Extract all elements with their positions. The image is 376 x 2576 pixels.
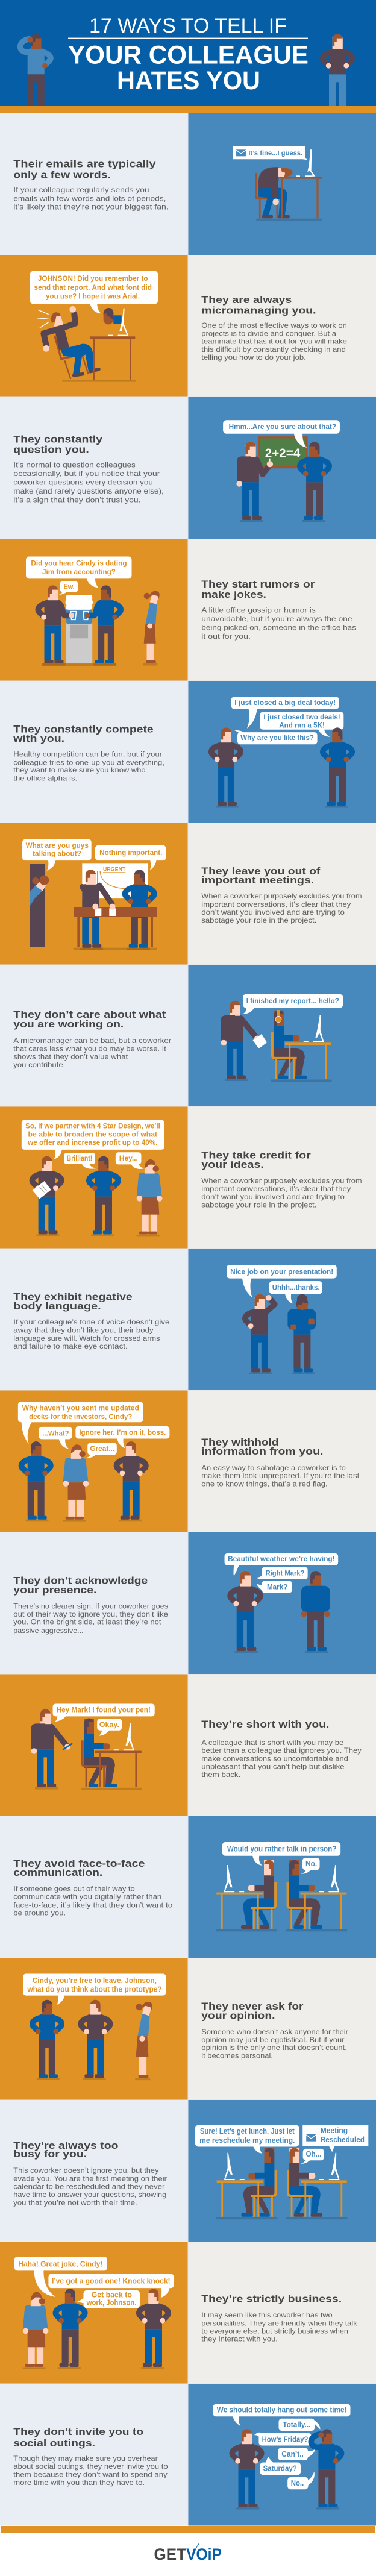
speech bubble [30,271,158,313]
body text: one to know things, that’s a red flag. [201,1480,328,1488]
body text: Healthy competition can be fun, but if your [13,750,162,759]
figure: man at desk [216,1860,277,1931]
title: YOUR COLLEAGUE [68,40,309,69]
illustration: rescheduled lunch [195,2125,368,2219]
heading: communication. [13,1867,102,1878]
speech bubbles: Right Mark? [266,1569,304,1578]
heading: They’re always too [13,2140,119,2151]
speech bubble: send that report. And what font did [34,283,152,292]
figure: colleague hands on hips [300,442,329,522]
speech bubbles: Okay. [99,1720,119,1729]
body text: Someone who doesn’t ask anyone for their [201,2028,348,2036]
panel: 13 face-to-face [0,1816,376,1958]
heading: They never ask for [201,2001,304,2012]
illustration: excuses [213,2404,350,2510]
heading [13,434,103,456]
heading [201,294,316,316]
heading: your opinion. [201,2010,275,2021]
heading: you are working on. [13,1018,124,1030]
figure: man [230,1571,260,1653]
body text: If someone goes out of their way to [13,1885,135,1893]
speech bubbles [22,839,166,871]
figure: man with pen [31,1709,70,1790]
body text: emails with few words and lots of periods, [13,194,166,202]
heading: They don’t invite you to [13,2426,143,2437]
title: HATES YOU [117,66,260,95]
illustration: stolen idea [22,1120,164,1236]
body text: the office alpha is. [13,774,77,782]
body text: opinion is the only one that doesn’t count, [201,2043,347,2052]
figure: man at cooler [38,585,74,666]
figure: man [232,2429,262,2510]
speech bubble: It’s fine...I guess. [248,149,302,157]
figure: man hands on hips [212,727,240,808]
body text: unpleasant that you can’t help but dislike [201,1763,345,1771]
body text: A colleague that is short with you may be [201,1738,344,1747]
heading [201,1150,311,1170]
heading [13,1291,133,1312]
door with peeking woman [30,864,49,947]
illustration: one-upping colleagues [212,697,352,808]
figure: woman [23,2292,48,2369]
figure: woman scratching head [20,34,51,114]
speech bubbles: work, Johnson. [86,2298,136,2307]
body text: it becomes personal. [201,2052,273,2060]
body text: coworker questions every decision you [13,478,153,487]
heading [13,158,156,180]
body text [13,2166,167,2207]
illustration: water cooler gossip [26,556,160,666]
speech bubbles [225,1553,338,1593]
illustration: chalkboard scene [223,420,340,522]
heading: make jokes. [201,589,266,600]
heading: They’re strictly business. [201,2293,342,2304]
speech bubbles: Uhhh...thanks. [272,1283,320,1291]
speech bubbles: No.. [291,2479,304,2487]
heading [201,2001,304,2021]
body text [201,1738,362,1779]
papers and arms [83,885,116,916]
figure: woman [137,1159,163,1236]
speech bubbles [18,1402,169,1458]
speech bubbles [222,1842,340,1874]
speech bubble: you use? I hope it was Arial. [46,292,140,301]
speech bubbles: And ran a 5K! [279,721,325,730]
body text: away that they don’t like you, their body [13,1326,154,1334]
figure: colleague at cooler [84,585,121,666]
figure: colleague at table [125,870,154,950]
body text: have time to answer your questions, showing [13,2190,166,2199]
illustration: man leaning back at desk [37,306,136,382]
body text [13,1036,171,1069]
figure: man at desk [286,2148,348,2219]
speech bubbles [53,1704,155,1736]
speech bubble [223,420,340,448]
heading: They avoid face-to-face [13,1858,145,1869]
panel: 5 compete [0,681,376,823]
body text: teammate that has it out for you will make [201,337,347,346]
speech bubbles: Nice job on your presentation! [230,1267,333,1276]
body text: make (and rarely questions anyone else), [13,487,164,495]
speech bubble: Hmm...Are you sure about that? [229,422,336,431]
body text: calendar to be rescheduled and they never [13,2183,164,2191]
panel: 11 presence [0,1532,376,1674]
panel: 8 credit [0,1106,376,1249]
illustration: slumped at desk [233,146,322,221]
figure: woman looking down [135,2002,152,2080]
speech bubbles [213,2404,350,2489]
speech bubbles: talking about? [33,849,81,857]
body text: opinion may just be egotistical. But if your [201,2035,345,2044]
title: 17 WAYS TO TELL IF [89,14,287,37]
body text: to everyone else, but strictly business when [201,2327,348,2336]
pen [63,1743,72,1750]
figure: colleague at desk [286,1860,347,1931]
illustration: ignored at desk [221,994,343,1082]
panel: 3 question [0,397,376,539]
speech bubbles: be able to broaden the scope of what [28,1130,157,1139]
logo: VOiP [186,2545,222,2563]
speech bubbles: Saturday? [263,2464,297,2473]
speech bubbles: Totally... [283,2420,310,2429]
body text: be around you. [13,1909,66,1917]
icon: envelope [306,2134,316,2142]
speech bubbles: we offer and increase profit up to 40%. [27,1138,157,1147]
heading: Their emails are typically [13,158,156,170]
panel: 7 don't care [0,965,376,1106]
speech bubbles [227,1265,337,1303]
figure: colleague arms crossed [287,1294,316,1374]
illustration: crossed arms [227,1265,337,1374]
heading [13,1009,166,1030]
speech bubbles: Meeting [321,2126,348,2135]
illustration: back to back desks [216,1842,347,1931]
figure: man [116,1441,146,1521]
body text: important conversations, it’s clear that they [201,1185,351,1193]
illustration: woman dismissed [23,1973,166,2080]
body text: personalities. They are friendly when they talk [201,2319,358,2328]
speech bubbles [195,2125,368,2164]
body text [201,1464,360,1488]
panel: 9 body language [0,1249,376,1390]
heading: They constantly [13,434,103,445]
speech bubble: Cindy, you’re free to leave. Johnson, [33,1976,157,1985]
body text: sabotage your role in the project. [201,1200,316,1209]
water cooler [42,595,116,666]
speech bubbles: Nothing important. [99,848,162,857]
heading: They don’t acknowledge [13,1575,148,1587]
heading: They are always [201,294,292,306]
body text: This coworker doesn’t ignore you, but they [13,2166,158,2175]
figure: man [81,2000,110,2080]
heading [13,2140,119,2160]
speech bubbles: Would you rather talk in person? [227,1844,336,1854]
chalkboard: 2+2=4 [265,447,300,460]
body text: it’s a sign that they don’t trust you. [13,495,141,504]
header banner [0,0,376,114]
panel: 4 rumors [0,539,376,681]
speech bubbles: Hey... [119,1154,138,1162]
icon: headphones [275,1010,281,1022]
speech bubbles [22,1120,164,1169]
body text: There’s no clearer sign. If your coworker goes [13,1602,168,1611]
heading [13,723,154,744]
speech bubbles: me reschedule my meeting. [199,2136,295,2145]
speech bubbles: Oh... [306,2150,321,2158]
body text [201,892,362,924]
speech bubbles: Did you hear Cindy is dating [31,559,127,568]
heading: your ideas. [201,1159,264,1170]
speech bubbles: How’s Friday? [262,2435,308,2444]
speech bubbles: I just closed a big deal today! [234,698,336,707]
body text: better than a colleague that ignores you. They [201,1746,362,1755]
body text: passive aggressive... [13,1626,83,1635]
speech bubbles: Ew. [63,583,75,591]
heading: They constantly compete [13,723,154,735]
body text: It’s normal to question colleagues [13,461,136,469]
figure: man with paper [32,1156,61,1236]
body text: them back. [201,1770,240,1779]
figure: Mark arms down [301,1571,330,1653]
speech bubbles: Can’t.. [281,2450,304,2458]
panel: 14 opinion [0,1958,376,2099]
heading: with you. [13,733,64,744]
figure: man pointing at board [236,442,273,522]
figure: man holding report [221,1001,260,1081]
figure: boss [33,2000,61,2080]
body text [201,2028,348,2060]
speech bubbles: Jim from accounting? [42,568,116,576]
speech bubbles: Haha! Great joke, Cindy! [18,2260,102,2269]
illustration: closed-door meeting [22,839,166,950]
body text: It may seem like this coworker has two [201,2311,333,2319]
body text: you contribute. [13,1061,65,1069]
speech bubbles [14,2257,174,2308]
body text: they interact with you. [201,2334,278,2343]
body text [13,1318,170,1350]
heading: They’re short with you. [201,1719,329,1730]
illustration: jokes [14,2257,174,2369]
figure: colleague scratching head [311,2429,342,2510]
icon: envelope [236,149,246,156]
speech bubbles: Mark? [267,1582,287,1591]
body text: it out for you. [201,632,251,641]
body text: occasionally, but if you notice that your [13,469,160,478]
heading: only a few words. [13,169,111,180]
body text: An easy way to sabotage a coworker is to [201,1464,346,1472]
speech bubble [23,1973,166,2005]
body text: One of the most effective ways to work on [201,321,347,330]
body text: telling you how to do your job. [201,353,306,362]
heading: They leave you out of [201,865,321,877]
heading [13,2426,143,2449]
orange footer bar [1,2526,375,2533]
body text: unavoidable, but if you’re always the one [201,615,352,623]
body text: and failure to make eye contact. [13,1342,128,1350]
heading: They start rumors or [201,578,315,590]
title [68,14,309,95]
heading [13,1858,145,1878]
heading: information from you. [201,1446,323,1457]
body text: it’s likely that they’re not your biggest fan. [13,203,169,212]
speech bubbles: Beautiful weather we’re having! [228,1555,335,1563]
heading [201,578,315,600]
speech bubbles: So, if we partner with 4 Star Design, we’ll [25,1121,160,1130]
body text: When a coworker purposely excludes you from [201,892,362,900]
speech bubbles: Why haven’t you sent me updated [22,1403,139,1412]
body text: projects is to divide and conquer. But a [201,329,336,337]
speech bubbles: No. [306,1860,317,1868]
heading: micromanaging you. [201,304,316,316]
speech bubble [241,994,343,1014]
figure: man at table [80,870,103,950]
heading: They withhold [201,1437,278,1448]
heading: important meetings. [201,874,314,886]
body text [13,461,164,504]
logo: GET [154,2545,186,2563]
speech bubbles: Why are you like this? [240,733,314,742]
body text: communicate with you digitally rather than [13,1893,161,1901]
chalkboard [258,436,308,468]
body text: shows that they don’t value what [13,1052,128,1061]
body text: important conversations, it’s clear that they [201,900,351,909]
speech bubbles: Get back to [92,2290,132,2299]
figure: man hands on hips [323,34,352,114]
speech bubbles: Rescheduled [321,2136,365,2144]
body text: about social outings, they never invite you to [13,2462,168,2471]
panel: 12 short [0,1674,376,1816]
body text: evade you. You are the first meeting on their [13,2174,167,2183]
body text: A micromanager can be bad, but a coworker [13,1036,171,1045]
whiteboard: URGENT [103,866,126,872]
body text: Though they may make sure you overhear [13,2454,158,2463]
heading: They don’t care about what [13,1009,166,1020]
panel: 1 emails [0,113,376,255]
body text [13,1602,168,1635]
logo [154,2543,222,2563]
illustration: ignored greeting [225,1553,338,1653]
figure: man hand raised [245,1294,275,1374]
body text: this difficult by constantly checking in and [201,345,346,354]
body text: language sure will. Watch for crossed arms [13,1334,160,1343]
heading: question you. [13,443,89,456]
body text [201,2311,358,2343]
speech bubbles [26,556,132,595]
heading [201,1437,323,1457]
body text: that cares less what you do may be worse. It [13,1044,167,1053]
footer [0,2526,376,2576]
heading [13,1575,148,1596]
speech bubbles: I’ve got a good one! Knock knock! [52,2277,171,2286]
speech bubbles: What are you guys [26,841,89,850]
body text: make them look unprepared. If you’re the last [201,1471,360,1480]
illustration: withheld info [18,1402,169,1522]
paper [33,1181,51,1199]
panel: 15 busy [0,2100,376,2242]
body text: more time with you than they have to. [13,2478,145,2487]
body text: out of their way to ignore you, they don’t like [13,1610,168,1619]
body text: If your colleague regularly sends you [13,186,149,194]
body text [13,1885,173,1917]
heading [201,865,321,886]
panel: 6 meetings [0,823,376,964]
body text: A little office gossip or humor is [201,606,316,615]
figure: man [139,2289,168,2369]
body text [13,2454,168,2487]
body text [201,321,347,362]
body text: When a coworker purposely excludes you from [201,1177,362,1185]
body text [201,1177,362,1209]
body text: you that you’re not worth their time. [13,2198,137,2207]
heading: They exhibit negative [13,1291,133,1303]
body text: they want to make sure you know who [13,766,146,774]
body text [13,750,164,782]
speech bubbles: Sure! Let’s get lunch. Just let [200,2127,295,2136]
speech bubble: what do you think about the prototype? [27,1985,162,1994]
figure: boss [21,1441,51,1521]
speech bubble [233,146,307,160]
panel: 10 withhold [0,1391,376,1532]
heading: your presence. [13,1584,96,1596]
body text: colleague tries to one-up you at everything, [13,758,164,766]
figure: woman looking down [143,591,160,666]
figure: colleague [89,1156,118,1236]
panel: 16 strictly business [0,2242,376,2384]
body text [13,186,169,212]
speech bubbles: We should totally hang out some time! [217,2405,347,2414]
heading: social outings. [13,2437,95,2449]
figure: boss [55,2289,85,2369]
body text: If your colleague’s tone of voice doesn’t give [13,1318,170,1326]
figure: colleague at desk [271,1010,332,1082]
body text: don’t want you involved and are trying to [201,908,345,917]
heading: body language. [13,1300,101,1312]
speech bubbles: Brilliant! [67,1154,92,1162]
body text [201,606,356,641]
figure: colleague hands on hips [323,727,352,808]
body text: don’t want you involved and are trying to [201,1192,345,1201]
heading: busy for you. [13,2148,87,2160]
whiteboard [82,863,148,899]
speech bubbles: Hey Mark! I found your pen! [57,1706,151,1714]
speech bubbles: decks for the investors, Cindy? [29,1412,132,1421]
body text: sabotage your role in the project. [201,916,316,924]
orange strip [0,106,376,113]
speech bubbles: Ignore her. I’m on it, boss. [79,1428,166,1437]
speech bubbles: ...What? [42,1429,69,1438]
speech bubbles [231,697,343,744]
speech bubble: JOHNSON! Did you remember to [38,274,148,283]
body text: face-to-face, it’s likely that they don’t want to [13,1901,173,1910]
report paper [253,1034,267,1048]
speech bubbles: I just closed two deals! [263,713,340,721]
figure: colleague at desk [81,1719,142,1790]
heading: They take credit for [201,1150,311,1161]
figure: colleague on phone [216,2137,277,2219]
body text: you. On the bright side, at least they’re not [13,1618,161,1626]
illustration: found pen [31,1704,155,1790]
body text: being picked on, someone in the office has [201,624,356,632]
speech bubbles: Great... [90,1444,114,1453]
speech bubble: I finished my report... hello? [246,997,339,1005]
body text: make conversations so uncomfortable and [201,1754,348,1763]
panel: 2 micromanaging [0,255,376,396]
panel: 17 social outings [0,2384,376,2526]
meeting table [74,907,157,950]
figure: woman [63,1444,89,1522]
body text: them because they don’t want to spend any [13,2471,168,2479]
